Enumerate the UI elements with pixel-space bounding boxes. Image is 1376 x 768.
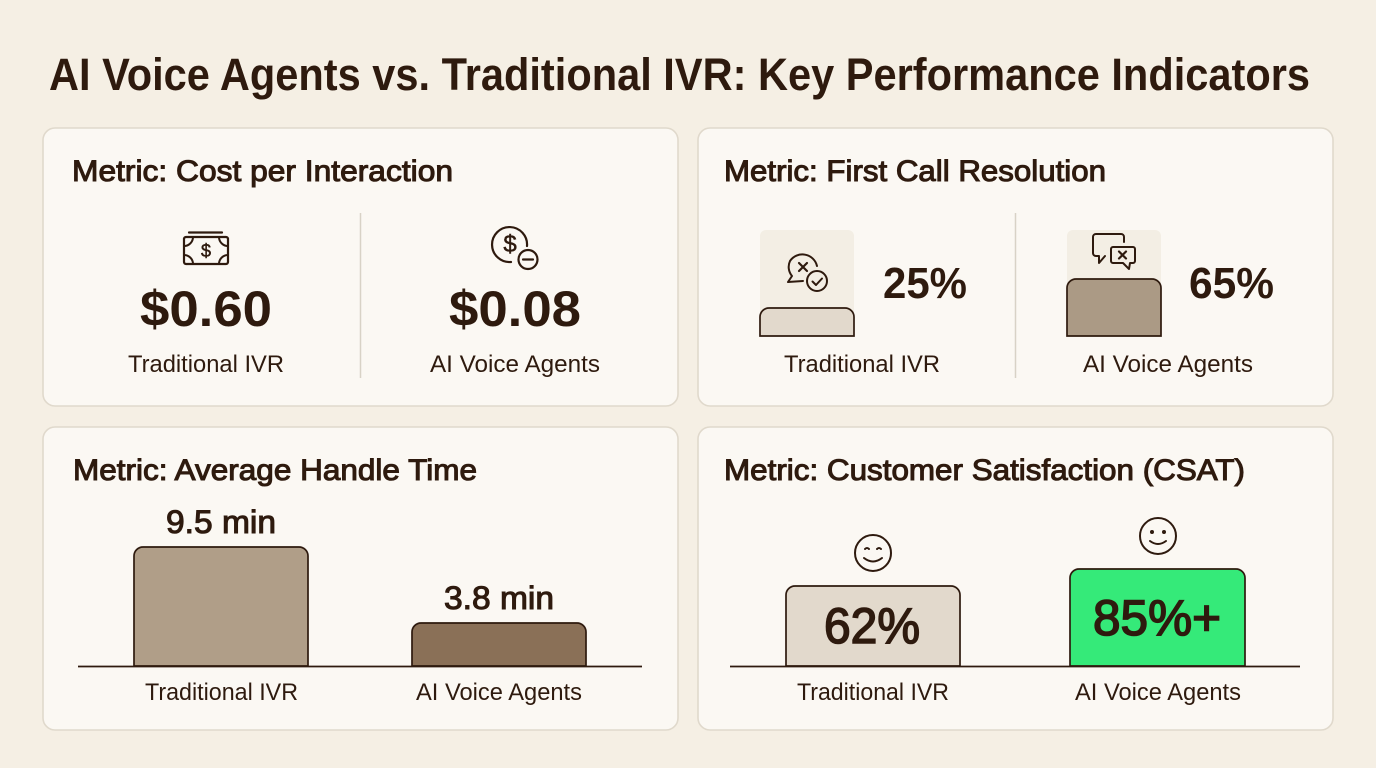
value: 9.5 min: 9.5 min [166,504,276,540]
bar: traditional IVR resolution [760,230,854,336]
value: 3.8 min: 3.8 min [444,580,554,616]
value: AI voice agents cost: $0.08 [449,281,581,337]
heading: first call resolution: Metric: First Call Resolution [724,155,1106,188]
panel: average handle time [43,427,678,730]
label: traditional IVR: Traditional IVR [784,351,940,378]
icon: banknote: $ [201,241,211,261]
heading: customer satisfaction: Metric: Customer Satisfaction (CSAT) [724,454,1245,487]
bar: AI voice agents 3.8 min [412,623,586,666]
bar: AI voice agents 85%+ [1070,569,1245,666]
panel: customer satisfaction [698,427,1333,730]
title: AI Voice Agents vs. Traditional IVR: Key Performance Indicators [49,49,1310,100]
panel: cost per interaction [43,128,678,406]
bar: traditional IVR 62% [786,586,960,666]
bar: traditional IVR 9.5 min [134,547,308,666]
value: AI voice agents resolution: 65% [1189,259,1274,308]
icon: speech bubble with check [788,254,827,291]
label: traditional IVR: Traditional IVR [145,679,298,706]
heading: average handle time: Metric: Average Handle Time [73,454,477,487]
icon: coin with minus [492,227,538,269]
icon: smiley AI voice agents [1140,518,1176,554]
label: AI voice agents: AI Voice Agents [416,679,582,706]
value: traditional IVR resolution: 25% [883,259,967,308]
value: 85%+: 85%+ [1093,590,1221,646]
bar: AI voice agents resolution [1067,230,1161,336]
label: traditional IVR: Traditional IVR [128,351,284,378]
icon: two speech bubbles [1093,234,1135,269]
value: traditional IVR cost: $0.60 [140,281,272,337]
panel: first call resolution [698,128,1333,406]
label: AI voice agents: AI Voice Agents [1083,351,1253,378]
label: AI voice agents: AI Voice Agents [1075,679,1241,706]
label: AI voice agents: AI Voice Agents [430,351,600,378]
value: 62%: 62% [824,598,920,654]
icon: banknote [184,232,228,264]
icon: coin with minus: $ [503,231,517,258]
icon: smiley traditional IVR [855,535,891,571]
label: traditional IVR: Traditional IVR [797,679,949,706]
heading: cost per interaction: Metric: Cost per Interaction [72,155,453,188]
